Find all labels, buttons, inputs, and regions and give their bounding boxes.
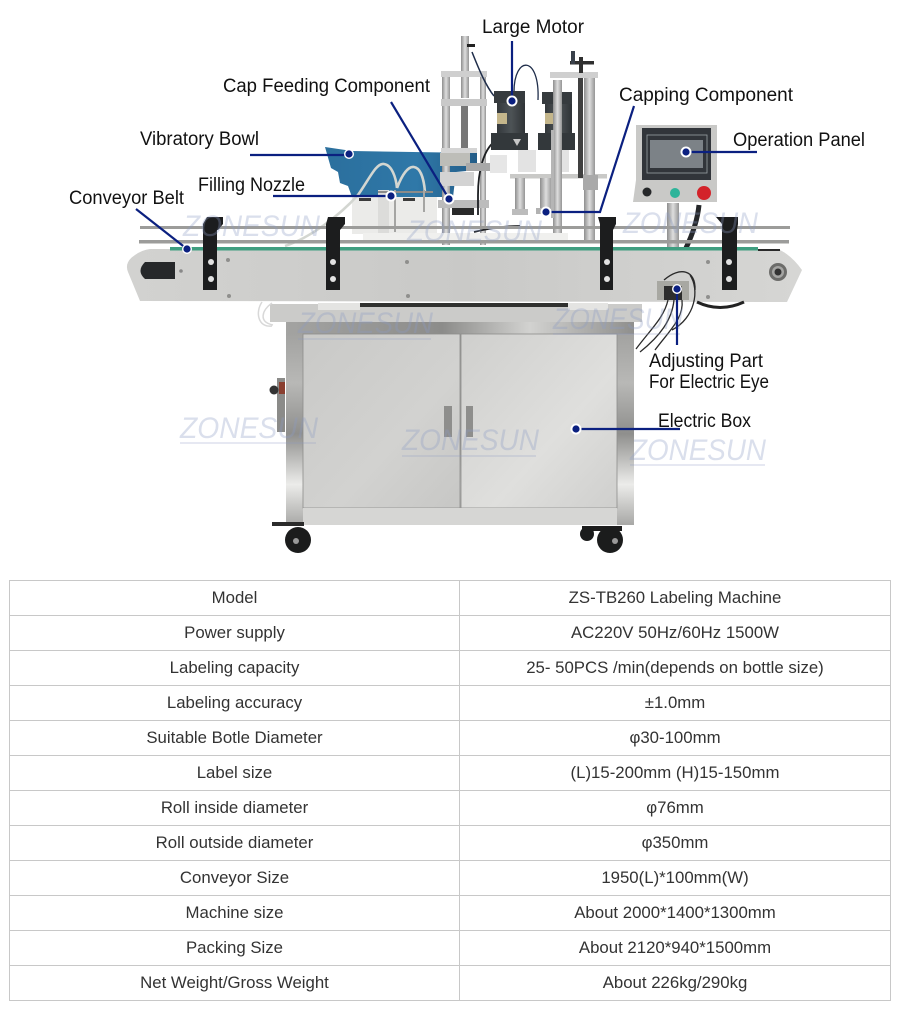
callout: adjusting part for electric eye: For Electric Eye	[649, 372, 769, 393]
callout: electric box: Electric Box	[658, 411, 751, 432]
callout: cap feeding component: Cap Feeding Component	[223, 76, 431, 97]
callout: conveyor belt: Conveyor Belt	[69, 188, 185, 209]
row: power supply: AC220V 50Hz/60Hz 1500W	[571, 623, 779, 642]
row: packing size	[186, 938, 771, 957]
watermarks: ZONESUN	[406, 215, 542, 248]
cap feeding columns	[438, 36, 538, 245]
watermarks: ZONESUN	[401, 424, 539, 457]
callout: large motor	[482, 17, 585, 106]
row: roll inside diameter: φ76mm	[646, 798, 704, 817]
row: model: ZS-TB260 Labeling Machine	[569, 588, 781, 607]
conveyor body	[127, 217, 802, 302]
rail clamps	[203, 217, 738, 290]
callout: cap feeding component	[223, 76, 454, 204]
row: labeling accuracy	[167, 693, 705, 712]
callout: filling nozzle: Filling Nozzle	[198, 175, 305, 196]
right caster	[580, 526, 623, 553]
vibratory bowl	[325, 147, 477, 234]
filling tubes and nozzles	[285, 164, 433, 246]
callout: capping component	[540, 85, 794, 218]
row: roll inside diameter	[161, 798, 704, 817]
watermarks: ZONESUN	[179, 412, 318, 445]
callout: capping component: Capping Component	[619, 85, 794, 106]
operation panel	[633, 125, 717, 249]
row: machine size	[186, 903, 776, 922]
row: model: Model	[212, 588, 257, 607]
callout: operation panel: Operation Panel	[733, 130, 865, 151]
watermarks: ZONESUN	[182, 210, 320, 243]
callout: large motor: Large Motor	[482, 17, 585, 38]
row: bottle diameter	[146, 728, 721, 747]
row: weight: Net Weight/Gross Weight	[140, 973, 329, 992]
row: model	[140, 588, 824, 992]
callout: vibratory bowl	[140, 129, 354, 159]
capping head assembly	[490, 51, 607, 242]
conveyor belt surface	[170, 247, 758, 250]
row: label size: Label size	[197, 763, 272, 782]
cabinet base	[258, 302, 642, 553]
row: labeling accuracy: ±1.0mm	[645, 693, 705, 712]
left door	[303, 334, 460, 508]
callout: conveyor belt	[69, 188, 192, 254]
callout: electric box	[570, 411, 751, 434]
bearing	[769, 263, 787, 281]
row: bottle diameter: Suitable Botle Diameter	[146, 728, 323, 747]
row: conveyor size: 1950(L)*100mm(W)	[601, 868, 749, 887]
row: labeling accuracy: Labeling accuracy	[167, 693, 302, 712]
white bowl base	[352, 197, 437, 234]
large motors	[491, 91, 575, 150]
callout: vibratory bowl: Vibratory Bowl	[140, 129, 259, 150]
callout: adjusting part for electric eye	[649, 284, 769, 393]
row: conveyor size: Conveyor Size	[180, 868, 289, 887]
white transfer plate	[363, 233, 568, 243]
side badge	[140, 262, 175, 279]
row: roll outside diameter: Roll outside diameter	[156, 833, 313, 852]
machine illustration with callouts	[69, 17, 865, 553]
row: labeling capacity	[170, 658, 824, 677]
row: bottle diameter: φ30-100mm	[629, 728, 721, 747]
row: packing size: Packing Size	[186, 938, 283, 957]
row: weight: About 226kg/290kg	[603, 973, 747, 992]
row: weight	[140, 973, 747, 992]
door handles	[444, 406, 473, 437]
specification table	[9, 580, 891, 1001]
row: roll inside diameter: Roll inside diameter	[161, 798, 308, 817]
row: power supply	[184, 623, 779, 642]
left caster	[272, 522, 311, 553]
watermarks: ZONESUN	[622, 207, 758, 240]
row: label size: (L)15-200mm (H)15-150mm	[571, 763, 779, 782]
row: roll outside diameter: φ350mm	[642, 833, 708, 852]
row: packing size: About 2120*940*1500mm	[579, 938, 771, 957]
watermarks: ZONESUN	[552, 303, 683, 336]
side frame	[286, 322, 634, 525]
top plate	[270, 304, 642, 322]
row: labeling capacity: Labeling capacity	[170, 658, 299, 677]
callout: adjusting part for electric eye: Adjusting Part	[649, 351, 764, 372]
watermarks: ZONESUN	[629, 434, 766, 467]
electric eye adjuster and wiring	[636, 272, 744, 352]
row: conveyor size	[180, 868, 749, 887]
row: roll outside diameter	[156, 833, 708, 852]
right door	[461, 334, 617, 508]
row: label size	[197, 763, 779, 782]
row: machine size: Machine size	[186, 903, 283, 922]
watermarks: ZONESUN	[297, 307, 433, 340]
guide rails	[139, 226, 790, 244]
callout: filling nozzle	[198, 175, 396, 202]
row: machine size: About 2000*1400*1300mm	[574, 903, 776, 922]
watermarks	[179, 207, 766, 467]
row: power supply: Power supply	[184, 623, 285, 642]
air regulator	[270, 378, 285, 432]
callout: operation panel	[680, 130, 865, 158]
row: labeling capacity: 25- 50PCS /min(depends on bottle size)	[526, 658, 824, 677]
